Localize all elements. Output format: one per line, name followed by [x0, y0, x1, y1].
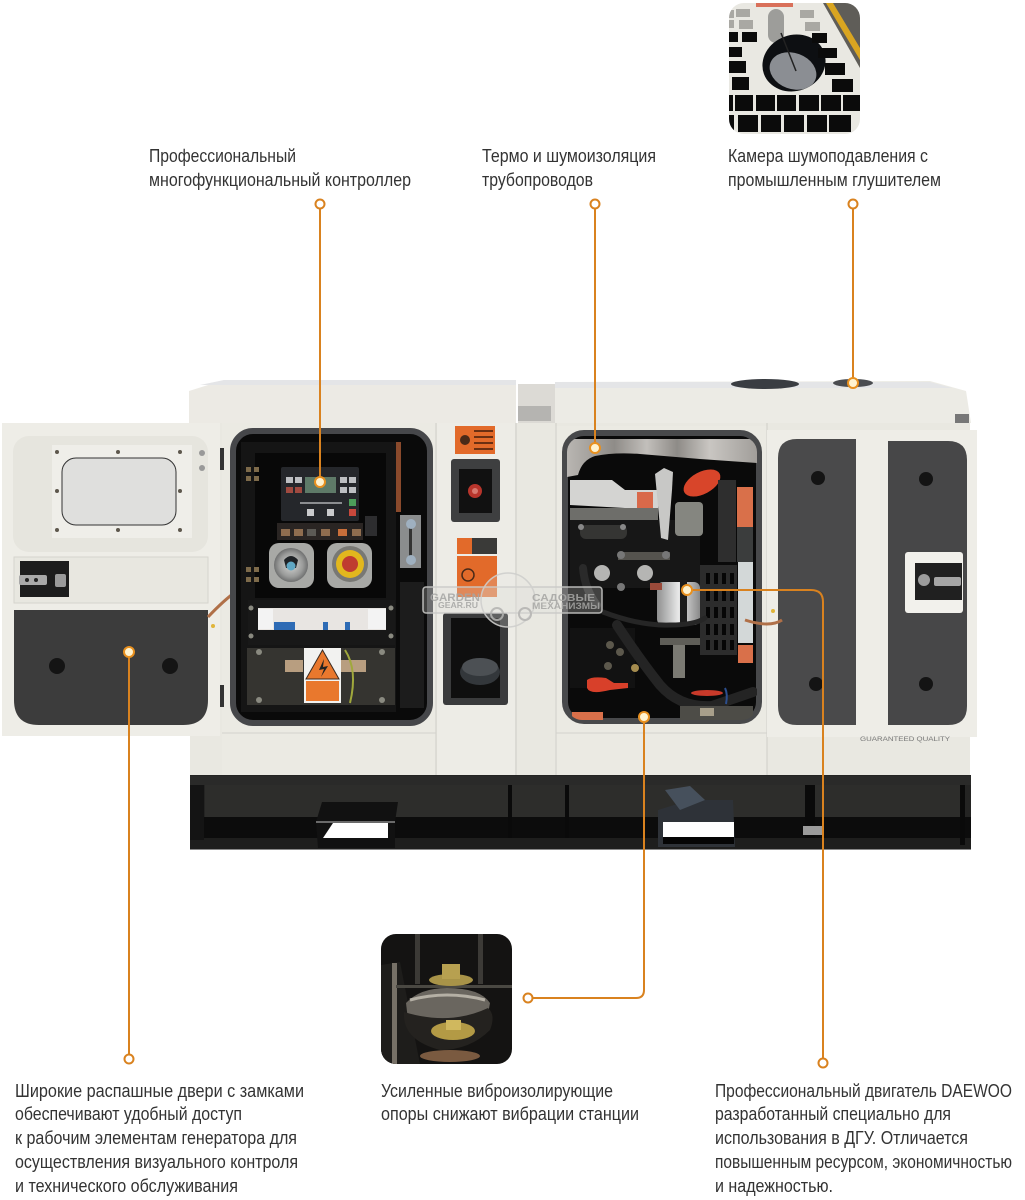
orange oil filter: [737, 487, 753, 562]
text: muffler: [728, 146, 941, 190]
engine cover: [570, 480, 658, 520]
text: doors: и технического обслуживания: [15, 1176, 238, 1196]
open right door: [745, 430, 977, 743]
inset photo: vibration mount: [381, 934, 512, 1064]
soundproof panel right: [888, 441, 967, 725]
emergency stop: [327, 543, 372, 588]
watermark: САДОВЫЕ: [532, 593, 595, 604]
thermal insulated pipe: [567, 439, 757, 477]
guaranteed quality label: GUARANTEED QUALITY: [860, 737, 950, 743]
inset photo: muffler chamber: [729, 3, 860, 134]
text: vibration mounts: Усиленные виброизолирующие: [381, 1081, 613, 1101]
alternator: [650, 580, 700, 625]
text: engine: и надежностью.: [715, 1176, 833, 1196]
soundproof panel left: [778, 439, 856, 725]
lifting bracket: [655, 468, 673, 540]
forklift slot right: [658, 786, 735, 847]
open left door: [2, 423, 238, 736]
text: engine: использования в ДГУ. Отличается: [715, 1128, 968, 1148]
text: vibration mounts: [381, 1081, 639, 1124]
generator unit: [2, 379, 977, 850]
fuel cap recess: [443, 613, 508, 705]
text: controller: многофункциональный контроллер: [149, 170, 411, 190]
callout: engine: [682, 585, 828, 1068]
door lock: [19, 561, 69, 597]
text: insulation: Термо и шумоизоляция: [482, 146, 656, 166]
circuit breakers: [248, 600, 395, 645]
warning label: [455, 426, 495, 454]
text: muffler: промышленным глушителем: [728, 170, 941, 190]
engine compartment: [565, 433, 759, 721]
forklift slot left: [316, 802, 398, 848]
text: doors: к рабочим элементам генератора для: [15, 1128, 297, 1148]
text: doors: обеспечивают удобный доступ: [15, 1104, 242, 1124]
control cabinet: [233, 431, 430, 723]
red terminal caps: [572, 677, 723, 720]
stop switch: [451, 459, 500, 522]
text: muffler: Камера шумоподавления с: [728, 146, 928, 166]
door lock right: [905, 552, 963, 613]
text: doors: Широкие распашные двери с замками: [15, 1081, 304, 1101]
callout: controller: [315, 200, 325, 487]
radiator grille: [700, 565, 737, 655]
lower bracket: [660, 638, 700, 645]
socket: [269, 543, 314, 588]
black hoses: [583, 568, 753, 706]
generator body: [190, 423, 970, 775]
engine block: [570, 520, 700, 688]
callout: vibration mounts: [524, 712, 649, 1002]
coolant tank: [738, 562, 753, 663]
watermark: GARDEN: [430, 592, 480, 604]
busbar compartment: [247, 648, 395, 705]
watermark: GEAR.RU: [438, 601, 478, 610]
text: insulation: [482, 146, 656, 190]
generator housing roof: [189, 379, 971, 427]
fuel warning labels: [457, 538, 497, 597]
text: controller: [149, 146, 411, 190]
perforated plate: [718, 480, 736, 562]
text: doors: [15, 1081, 304, 1196]
red rubber bulb: [684, 470, 720, 496]
callout: doors: [124, 647, 134, 1064]
callout: pipes insulation: [590, 200, 600, 453]
text: vibration mounts: опоры снижают вибрации станции: [381, 1104, 639, 1124]
black base frame: [190, 775, 971, 850]
soundproof panel: [14, 610, 208, 725]
silver sensor: [675, 502, 703, 536]
watermark: [423, 573, 602, 627]
switch strip: [277, 516, 377, 540]
callout: muffler: [848, 200, 858, 388]
center column: [443, 426, 508, 705]
text: engine: [715, 1081, 1012, 1196]
text: controller: Профессиональный: [149, 146, 296, 166]
text: engine: разработанный специально для: [715, 1104, 951, 1124]
text: insulation: трубопроводов: [482, 170, 593, 190]
watermark: МЕХАНИЗМЫ: [532, 601, 600, 611]
text: doors: осуществления визуального контроля: [15, 1152, 298, 1172]
high voltage warning sign: [304, 648, 341, 703]
controller display: [281, 467, 359, 521]
